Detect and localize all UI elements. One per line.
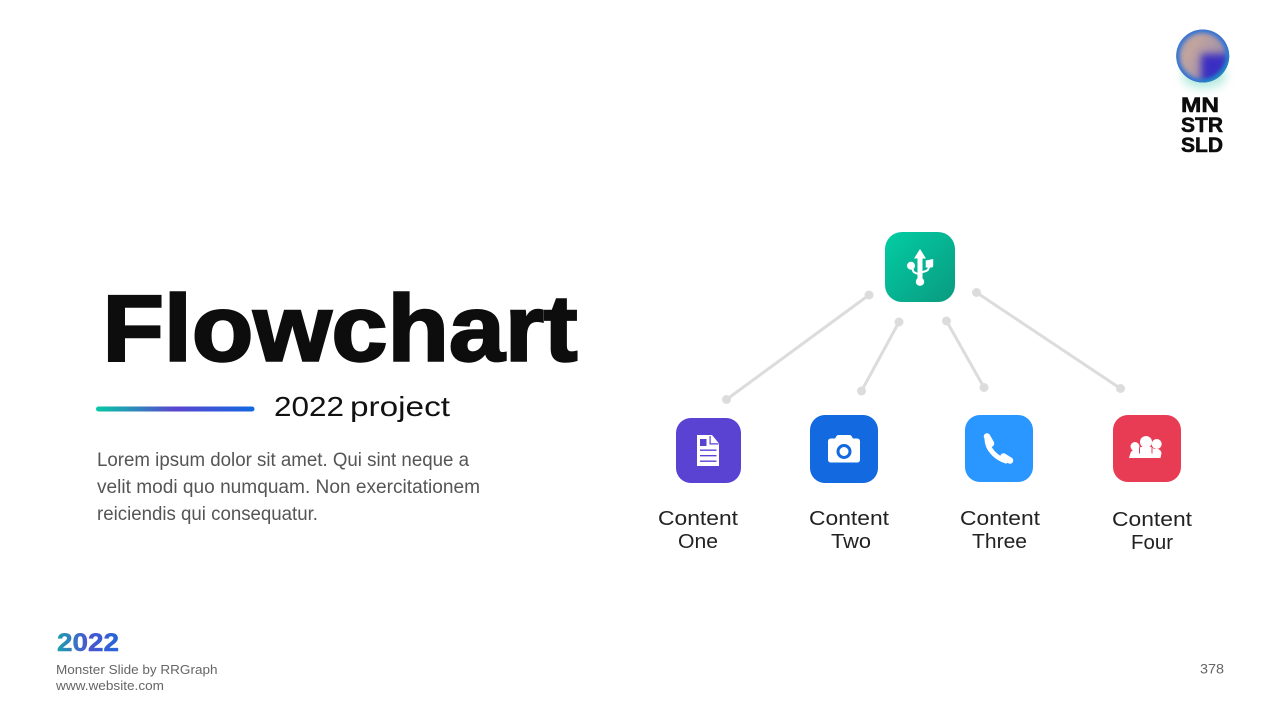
- footer year: 2022: [57, 629, 119, 657]
- node: content four: Four: [1131, 531, 1173, 554]
- body text: Lorem ipsum dolor sit amet. Qui sint neque a: [97, 450, 469, 471]
- subtitle: [274, 391, 450, 422]
- connector to content two: [857, 318, 904, 396]
- icon tile: people: [1113, 415, 1181, 482]
- body text: velit modi quo numquam. Non exercitationem: [97, 477, 480, 498]
- footer credits: www.website.com: [55, 678, 164, 693]
- gradient divider: [96, 406, 254, 412]
- page number: 378: [1200, 660, 1224, 676]
- node: content one: [658, 418, 741, 553]
- node: content two: Two: [831, 530, 871, 553]
- footer credits: Monster Slide by RRGraph: [56, 662, 218, 677]
- node: content one: One: [678, 530, 718, 553]
- icon: usb: [907, 249, 933, 286]
- connector to content three: [942, 316, 988, 392]
- icon tile: document: [676, 418, 741, 483]
- connectors: [722, 288, 1125, 404]
- logo wordmark: [1181, 93, 1223, 157]
- logo wordmark: STR: [1181, 113, 1223, 137]
- logo sphere: [1176, 30, 1230, 94]
- logo: [1176, 30, 1230, 152]
- logo wordmark: SLD: [1181, 133, 1223, 157]
- subtitle: project: [350, 391, 450, 422]
- subtitle: 2022: [274, 391, 344, 422]
- label: Content: [658, 507, 738, 530]
- connector to content four: [972, 288, 1125, 393]
- connector to content one: [722, 290, 874, 404]
- top node: usb: [885, 232, 955, 302]
- node: content two: [809, 415, 889, 553]
- body text: reiciendis qui consequatur.: [97, 504, 318, 525]
- icon tile: camera: [810, 415, 878, 483]
- label: Content: [809, 507, 889, 530]
- label: Content: [1112, 508, 1192, 531]
- node: content three: [960, 415, 1040, 553]
- logo wordmark: MN: [1181, 93, 1219, 117]
- footer credits: [55, 662, 218, 693]
- body text: [97, 450, 480, 525]
- title: Flowchart: [102, 276, 578, 380]
- node: content four: [1112, 415, 1192, 554]
- label: Content: [960, 507, 1040, 530]
- node: content three: Three: [972, 530, 1027, 553]
- icon tile: phone: [965, 415, 1033, 482]
